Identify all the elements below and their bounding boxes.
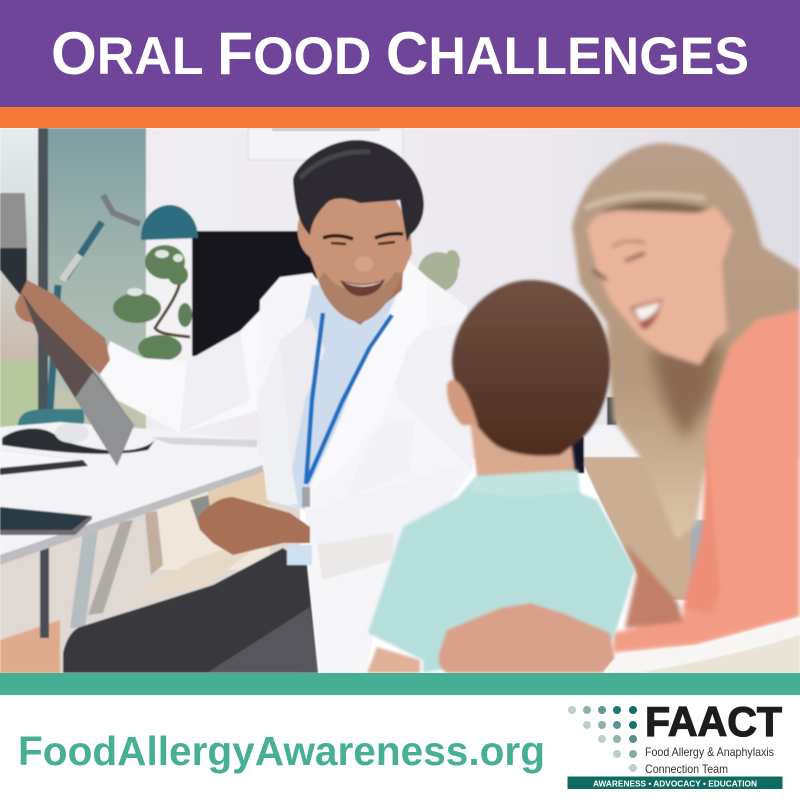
desk legs (70, 495, 212, 628)
monitor (192, 231, 317, 356)
tablet (0, 507, 92, 535)
far hand (625, 543, 683, 628)
website link text: FoodAllergyAwareness.org (18, 728, 545, 774)
logo name line 2: Connection Team (645, 762, 728, 776)
facial stubble (318, 272, 403, 322)
cabinet behind mother (562, 397, 706, 600)
head (452, 280, 610, 456)
logo tagline bar: AWARENESS • ADVOCACY • EDUCATION (593, 778, 757, 788)
boy (367, 280, 635, 673)
hair (572, 143, 800, 540)
coat body (257, 262, 473, 673)
title banner (0, 0, 800, 107)
sweater (613, 310, 800, 653)
window and garden (0, 128, 146, 638)
doctor (63, 140, 473, 673)
coat pocket (345, 420, 415, 500)
chair back (603, 617, 800, 673)
neck (470, 420, 575, 476)
photo: doctor with mother and child (0, 128, 800, 673)
mouth (340, 279, 385, 296)
desk lamp (18, 195, 198, 426)
logo wordmark: FAACT (645, 698, 782, 745)
shirt tail (133, 540, 250, 597)
coat right lapel (310, 260, 427, 490)
ear (447, 380, 478, 425)
arm (367, 647, 420, 673)
mother's hand on boy's back (438, 603, 615, 673)
wall (146, 128, 800, 458)
face (298, 195, 412, 322)
logo tagline bar (568, 776, 782, 789)
lanyard clip (302, 487, 310, 507)
lower hand (198, 497, 310, 555)
folder (0, 450, 88, 475)
coat left sleeve (100, 295, 295, 433)
title: ORAL FOOD CHALLENGES (51, 20, 749, 87)
x-ray lower piece (22, 293, 134, 466)
eyes (593, 253, 645, 280)
picture frame (248, 128, 403, 160)
mouth (630, 299, 662, 330)
neck (322, 270, 403, 325)
shirt (290, 283, 402, 510)
shirt (368, 470, 635, 673)
x-ray top piece (0, 193, 27, 295)
hair (293, 140, 424, 242)
trousers (63, 548, 318, 673)
logo dots (568, 706, 637, 772)
nose (355, 256, 373, 272)
dark hair underside (650, 345, 722, 440)
face and neck (587, 207, 733, 365)
mother (572, 143, 800, 653)
coat right cuff (305, 465, 458, 580)
logo name line 1: Food Allergy & Anaphylaxis (645, 745, 774, 759)
plant (113, 245, 460, 361)
FAACT logo (568, 698, 782, 789)
eyes and brows (323, 234, 403, 239)
green stripe (0, 673, 800, 695)
floor and under-desk background (0, 470, 300, 674)
hair highlight (585, 194, 705, 208)
lanyard (306, 313, 392, 484)
stethoscope (2, 423, 155, 454)
orange stripe (0, 107, 800, 128)
papers on desk (150, 437, 257, 447)
coat left lapel (280, 317, 325, 470)
doctor's hand holding x-ray (15, 280, 110, 374)
desk (0, 422, 263, 565)
